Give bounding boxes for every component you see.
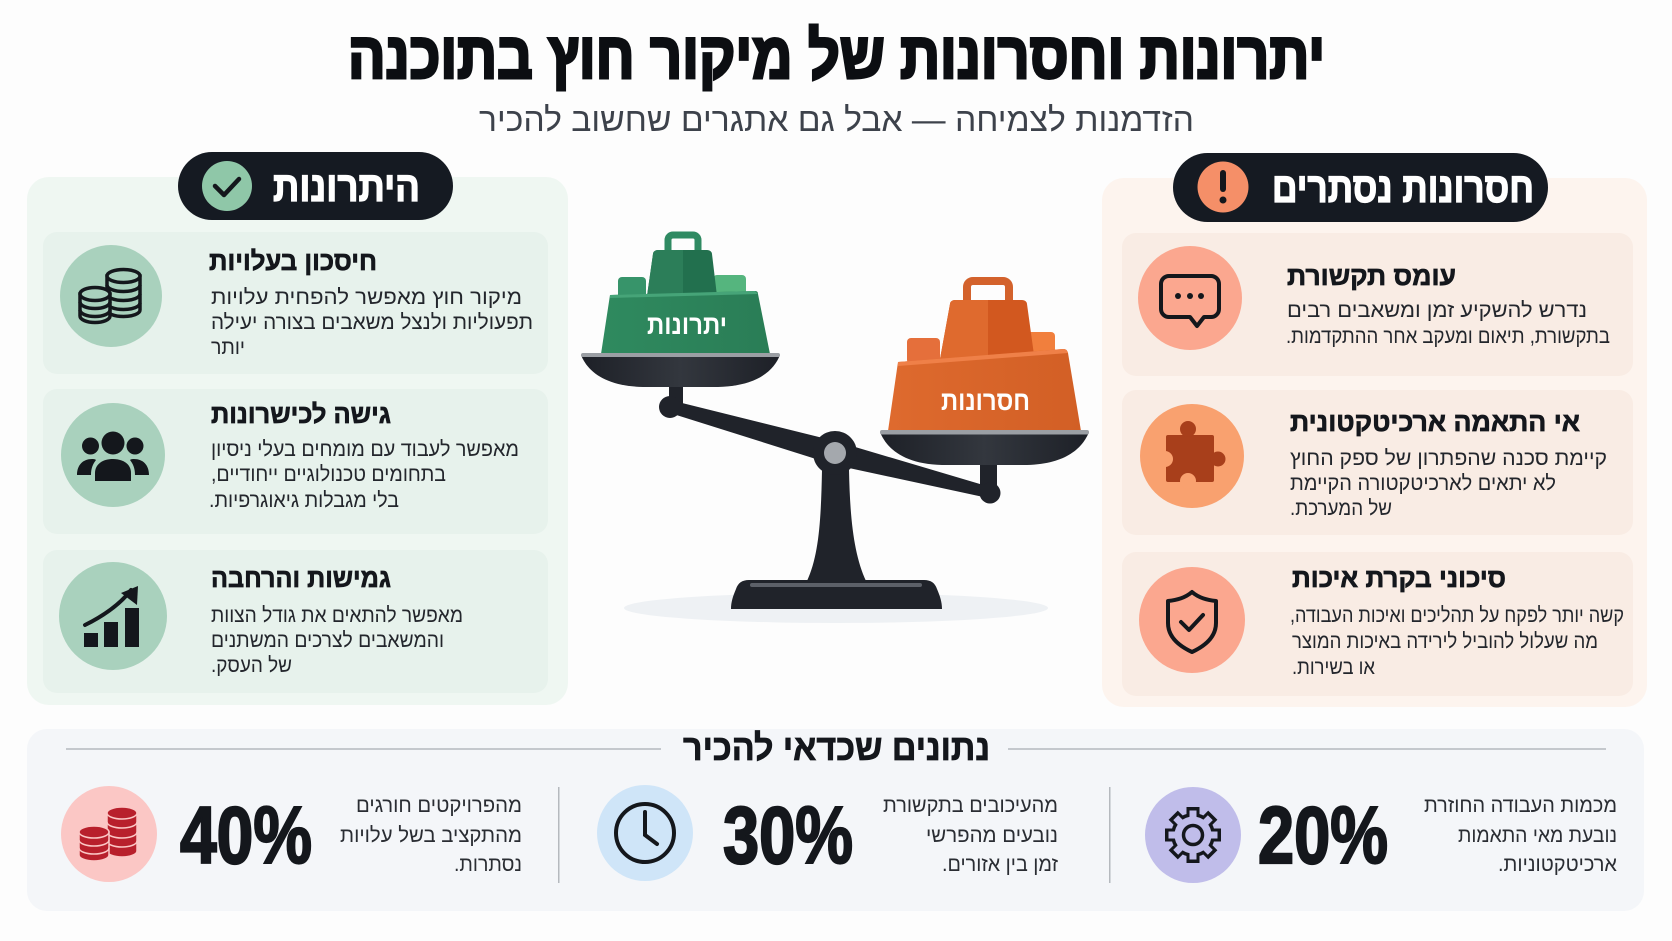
text: talent access: מאפשר לעבוד עם מומחים בעלי ניסיון	[211, 438, 519, 461]
icon: green weight	[601, 235, 770, 354]
heading: talent access: גישה לכישרונות	[211, 399, 391, 429]
title: יתרונות וחסרונות של מיקור חוץ בתוכנה	[348, 19, 1325, 92]
icon: coins	[60, 245, 162, 347]
text: 40 percent: נסתרות.	[454, 853, 522, 876]
icon: exclamation	[1198, 162, 1248, 212]
pill: advantages header: היתרונות	[273, 163, 420, 210]
right scale pan with orange weight	[880, 281, 1089, 465]
card: cost saving	[43, 232, 548, 374]
stat: 20 percent	[1145, 787, 1617, 883]
pill: disadvantages header: חסרונות נסתרים	[1272, 164, 1534, 211]
heading: architecture mismatch: אי התאמה ארכיטקטונית	[1290, 407, 1580, 437]
pill: disadvantages header	[1173, 153, 1548, 222]
icon: shield	[1139, 567, 1245, 673]
icon: orange weight	[888, 281, 1081, 431]
text: flexibility	[211, 604, 463, 677]
text: 40 percent: מהפרויקטים חורגים	[356, 794, 522, 817]
text: 30 percent: נובעים מהפרשי	[926, 824, 1058, 847]
text: communication load: נדרש להשקיע זמן ומשאבים רבים	[1287, 299, 1587, 322]
text: 40 percent: מהתקציב בשל עלויות	[340, 824, 522, 847]
text: 20 percent: נובעת מאי התאמות	[1458, 824, 1617, 847]
stat: 40 percent: 40%	[180, 791, 312, 881]
icon: clock	[616, 804, 674, 862]
heading: stats: נתונים שכדאי להכיר	[683, 727, 990, 768]
text: quality risks: מה שעלול להוביל לירידה באיכות המוצר	[1292, 630, 1598, 653]
icon: people	[61, 403, 165, 507]
scale beam	[659, 380, 1000, 504]
panel: advantages	[27, 152, 568, 705]
label: green weight: יתרונות	[647, 310, 727, 340]
card: talent access	[43, 389, 548, 534]
stats panel	[27, 727, 1644, 911]
text: 20 percent	[1424, 794, 1617, 876]
text: talent access: בתחומים טכנולוגיים ייחודיים,	[211, 463, 446, 486]
text: quality risks: או בשירות.	[1292, 656, 1375, 679]
text: flexibility: מאפשר להתאים את גודל הצוות	[211, 604, 463, 627]
card: architecture mismatch	[1122, 390, 1633, 535]
heading: quality risks: סיכוני בקרת איכות	[1292, 563, 1506, 593]
text: cost saving	[211, 286, 533, 359]
text: flexibility: של העסק.	[211, 654, 292, 677]
text: flexibility: והמשאבים לצרכים המשתנים	[211, 629, 444, 652]
icon: red coins	[79, 807, 137, 861]
right pan	[880, 430, 1089, 465]
heading: communication load: עומס תקשורת	[1287, 261, 1456, 291]
pill: advantages header	[178, 152, 453, 220]
scale illustration	[624, 380, 1048, 623]
text: 40 percent	[340, 794, 522, 876]
text: cost saving: מיקור חוץ מאפשר להפחית עלויות	[211, 286, 522, 309]
card: flexibility	[43, 550, 548, 693]
text: 30 percent: זמן בין אזורים.	[942, 853, 1058, 876]
icon: gear	[1165, 807, 1221, 863]
text: 30 percent	[883, 794, 1058, 876]
subtitle: הזדמנות לצמיחה — אבל גם אתגרים שחשוב להכיר	[479, 101, 1194, 138]
text: communication load: בתקשורת, תיאום ומעקב אחר ההתקדמות.	[1286, 325, 1610, 348]
icon: chat bubble	[1138, 246, 1242, 350]
heading: cost saving: חיסכון בעלויות	[209, 246, 377, 276]
panel: disadvantages	[1102, 153, 1647, 707]
icon: check	[202, 161, 252, 211]
text: talent access: בלי מגבלות גיאוגרפיות.	[209, 489, 399, 512]
left scale pan with green weight	[581, 235, 780, 387]
stat: 40 percent	[61, 786, 522, 882]
text: architecture mismatch	[1290, 447, 1607, 520]
text: architecture mismatch: לא יתאים לארכיטקטורה הקיימת	[1290, 472, 1556, 495]
card: quality risks	[1122, 552, 1633, 696]
card: communication load	[1122, 233, 1633, 376]
stat: 30 percent: 30%	[723, 791, 853, 881]
text: cost saving: תפעוליות ולנצל משאבים בצורה יעילה	[211, 311, 533, 334]
text: talent access	[209, 438, 519, 512]
icon: puzzle piece	[1140, 404, 1244, 508]
text: 20 percent: מכמות העבודה החוזרת	[1424, 794, 1617, 817]
left pan	[581, 353, 780, 387]
heading: flexibility: גמישות והרחבה	[211, 563, 391, 593]
text: 20 percent: ארכיטקטוניות.	[1498, 853, 1617, 876]
text: architecture mismatch: קיימת סכנה שהפתרון של ספק החוץ	[1290, 447, 1607, 470]
stat: 30 percent	[597, 785, 1058, 881]
text: quality risks	[1290, 604, 1624, 679]
text: 30 percent: מהעיכובים בתקשורת	[883, 794, 1058, 817]
icon: growth chart	[59, 562, 167, 670]
text: communication load	[1286, 299, 1610, 348]
scale stand	[731, 470, 942, 609]
text: architecture mismatch: של המערכת.	[1290, 497, 1392, 520]
text: cost saving: יותר	[211, 336, 245, 359]
label: orange weight: חסרונות	[941, 386, 1030, 416]
stat: 20 percent: 20%	[1258, 791, 1388, 881]
text: quality risks: קשה יותר לפקח על תהליכים ואיכות העבודה,	[1290, 604, 1624, 627]
